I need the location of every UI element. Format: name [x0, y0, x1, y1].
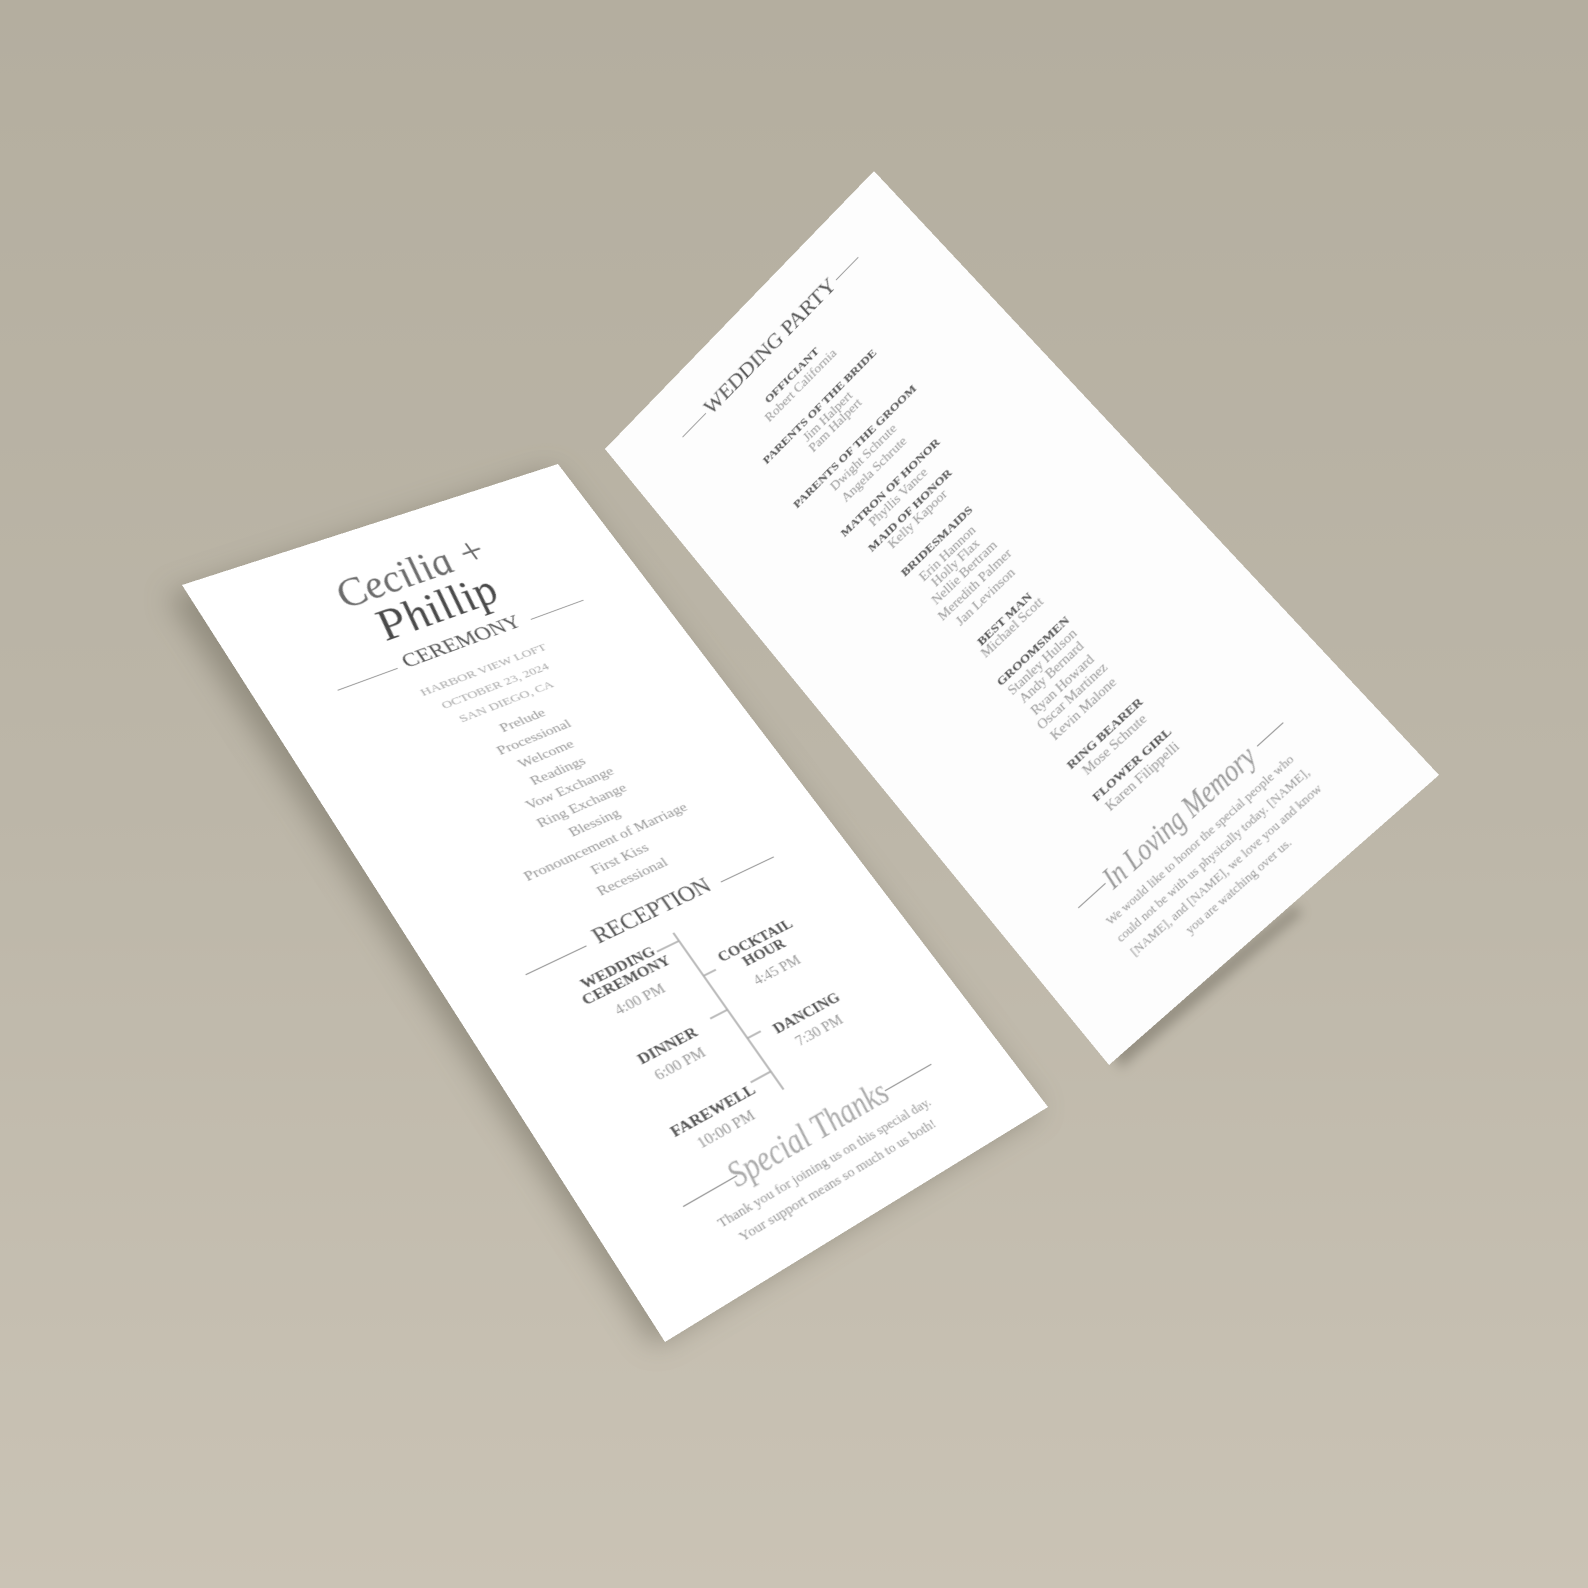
maid of honor: Kelly Kapoor — [886, 488, 950, 552]
order of ceremony list: Readings — [528, 754, 589, 788]
timeline event: dancing: 7:30 PM — [793, 1013, 847, 1050]
groomsmen: Stanley Hulson — [1006, 627, 1080, 699]
flower girl: FLOWER GIRL — [1089, 724, 1174, 804]
bridesmaids — [898, 503, 1018, 629]
timeline event: cocktail hour — [715, 917, 804, 989]
parents of the bride: Jim Halpert — [801, 389, 855, 445]
officiant: Robert California — [763, 347, 839, 425]
reception timeline — [656, 932, 784, 1090]
groomsmen: Ryan Howard — [1029, 653, 1097, 719]
parents of the groom: PARENTS OF THE GROOM — [791, 382, 919, 511]
thank you message: Your support means so much to us both! — [736, 1116, 939, 1245]
heading: wedding party: WEDDING PARTY — [700, 274, 840, 419]
best man: Michael Scott — [979, 595, 1047, 661]
venue and date: OCTOBER 23, 2024 — [438, 660, 551, 711]
timeline event: cocktail hour: 4:45 PM — [751, 954, 804, 989]
bridesmaids: Erin Hannon — [917, 524, 979, 585]
memorial message: you are watching over us. — [1183, 835, 1294, 937]
order of ceremony list: Prelude — [497, 706, 549, 735]
bridesmaids: Holly Flax — [930, 537, 983, 590]
heading: ceremony — [337, 600, 584, 691]
flower girl: Karen Filippelli — [1103, 740, 1183, 815]
groomsmen — [994, 613, 1120, 744]
timeline event: dinner: 6:00 PM — [652, 1046, 709, 1084]
groomsmen: Kevin Malone — [1048, 676, 1120, 744]
timeline event: wedding ceremony: CEREMONY — [579, 953, 674, 1009]
best man: BEST MAN — [974, 589, 1035, 648]
timeline event: wedding ceremony: 4:00 PM — [612, 982, 669, 1019]
parents of the groom: Dwight Schrute — [829, 422, 900, 494]
matron of honor: MATRON OF HONOR — [838, 435, 942, 539]
timeline event: wedding ceremony: WEDDING — [578, 944, 659, 993]
ring bearer: RING BEARER — [1064, 694, 1146, 772]
memorial message: [NAME], and [NAME], we love you and know — [1128, 781, 1325, 959]
bridesmaids: Nellie Bertram — [930, 539, 1000, 608]
timeline event: dinner: DINNER — [635, 1025, 701, 1068]
heading: special thanks: Special Thanks — [719, 1074, 896, 1195]
order of ceremony list — [494, 706, 690, 899]
bridesmaids: Jan Levinson — [954, 566, 1018, 629]
heading: in loving memory: In Loving Memory — [1095, 738, 1263, 895]
timeline event: cocktail hour: HOUR — [740, 936, 789, 969]
parents of the bride: PARENTS OF THE BRIDE — [760, 346, 879, 467]
ring bearer: Mose Schrute — [1080, 712, 1150, 778]
heading: wedding party — [682, 256, 859, 438]
venue and date — [417, 641, 556, 725]
thank you message: Thank you for joining us on this special day. — [714, 1095, 934, 1231]
groomsmen: Oscar Martinez — [1035, 661, 1111, 733]
maid of honor: MAID OF HONOR — [865, 466, 954, 554]
order of ceremony list: Processional — [494, 717, 574, 758]
timeline event: dancing: DANCING — [770, 990, 844, 1037]
panel: programme front card — [182, 464, 1048, 1342]
groomsmen: Andy Bernard — [1017, 639, 1087, 707]
memorial message: could not be with us physically today. [NAME], — [1114, 765, 1312, 945]
memorial message: We would like to honor the special people who — [1103, 752, 1297, 928]
timeline event: cocktail hour: COCKTAIL — [715, 917, 796, 965]
timeline event: dinner — [635, 1025, 709, 1084]
bridesmaids: Meredith Palmer — [936, 547, 1015, 624]
groomsmen: GROOMSMEN — [994, 613, 1072, 689]
officiant: OFFICIANT — [762, 344, 821, 406]
order of ceremony list: Pronouncement of Marriage — [521, 801, 690, 884]
venue and date: SAN DIEGO, CA — [456, 678, 556, 725]
script names — [325, 529, 509, 650]
heading: reception — [525, 856, 774, 976]
timeline event: farewell: FAREWELL — [668, 1082, 759, 1141]
parents of the groom: Angela Schrute — [840, 435, 910, 505]
matron of honor: Phyllis Vance — [867, 466, 931, 530]
parents of the bride: Pam Halpert — [807, 397, 865, 455]
heading: ceremony: CEREMONY — [397, 612, 526, 672]
panel: programme back card — [605, 171, 1439, 1065]
heading: in loving memory — [1078, 722, 1284, 908]
venue and date: HARBOR VIEW LOFT — [417, 641, 549, 698]
order of ceremony list: Vow Exchange — [523, 765, 617, 813]
script names: Cecilia + — [325, 529, 497, 617]
order of ceremony list: Welcome — [516, 738, 577, 771]
order of ceremony list: Ring Exchange — [534, 781, 630, 831]
order of ceremony list: First Kiss — [588, 841, 652, 878]
script names: Phillip — [364, 567, 509, 650]
timeline event: farewell: 10:00 PM — [694, 1108, 759, 1152]
heading: reception: RECEPTION — [587, 874, 716, 949]
bridesmaids: BRIDESMAIDS — [898, 503, 975, 579]
order of ceremony list: Blessing — [566, 806, 624, 840]
order of ceremony list: Recessional — [594, 855, 671, 899]
heading: special thanks — [682, 1064, 932, 1208]
